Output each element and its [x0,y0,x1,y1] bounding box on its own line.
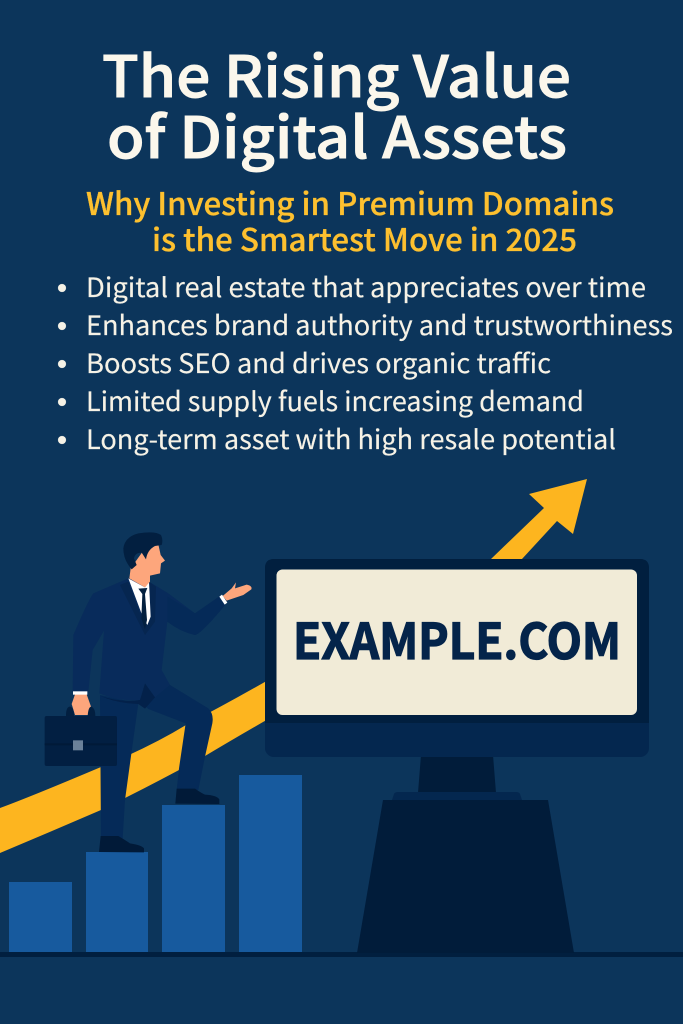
bullet list: Digital real estate that appreciates over time [86,266,646,305]
monitor frame [265,559,649,757]
briefcase [45,707,117,766]
bullet list: Enhances brand authority and trustworthiness [86,304,673,343]
title [102,32,571,175]
subtitle: Why Investing in Premium Domains [86,179,614,224]
shoes [99,789,219,852]
right hand and cuff [219,582,252,605]
title: The Rising Value [102,32,571,114]
jacket shadows [101,683,155,709]
bullet list: Limited supply fuels increasing demand [86,380,584,419]
businessman [45,532,252,852]
lapels [120,582,156,635]
left hand and cuff [72,691,91,715]
front leg [138,685,213,790]
arrow [491,479,587,559]
right arm shade [167,596,225,635]
head [123,532,165,587]
monitor [265,559,649,953]
growth swoosh ribbon [0,679,270,853]
jacket [73,578,225,700]
bullet list [58,266,673,457]
back leg [100,695,138,838]
monitor screen [276,570,637,715]
bullet list: Boosts SEO and drives organic traffic [86,342,551,381]
subtitle: is the Smartest Move in 2025 [152,215,577,260]
title: of Digital Assets [107,93,567,175]
domain name: EXAMPLE.COM [293,603,621,674]
ground line [0,952,683,957]
shirt and tie [128,578,151,629]
monitor stand [357,755,574,953]
bullet list: Long-term asset with high resale potential [86,418,616,457]
subtitle [86,179,614,260]
bar chart [9,775,302,952]
